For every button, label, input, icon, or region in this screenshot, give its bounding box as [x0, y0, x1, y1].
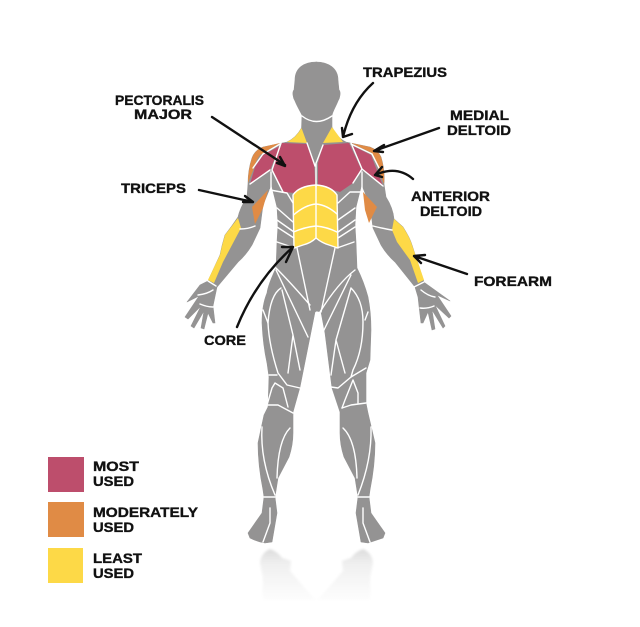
floor reflection of the feet [260, 549, 373, 600]
legend item: moderately used [48, 502, 199, 537]
muscle: triceps [252, 190, 377, 224]
label: pectoralis major [115, 92, 285, 166]
legend item: moderately used: USED [93, 519, 134, 535]
label: anterior deltoid: DELTOID [420, 203, 482, 219]
label: forearm: FOREARM [474, 273, 552, 289]
arrow: forearm [414, 255, 467, 274]
label: triceps: TRICEPS [121, 180, 186, 196]
muscle: core [293, 185, 338, 248]
muscle: medial deltoid [248, 143, 384, 184]
arrow: pectoralis major [212, 117, 285, 166]
legend item: least used: USED [93, 565, 134, 581]
label: core: CORE [204, 332, 246, 348]
label: forearm [414, 255, 552, 289]
legend [48, 457, 199, 583]
legend item: most used: USED [93, 473, 134, 489]
muscle: forearm [208, 218, 424, 283]
label: medial deltoid: MEDIAL [450, 107, 509, 123]
label: anterior deltoid: ANTERIOR [411, 188, 490, 204]
label: trapezius [342, 64, 447, 137]
body figure [185, 62, 451, 543]
arrow: triceps [199, 190, 253, 202]
label: core [204, 247, 293, 348]
arrow: medial deltoid [374, 128, 439, 152]
legend item: least used: LEAST [93, 550, 142, 566]
legend item: least used [48, 548, 142, 583]
legend item: most used [48, 457, 139, 492]
label: pectoralis major: PECTORALIS [115, 92, 204, 108]
label: anterior deltoid [375, 167, 490, 219]
muscle: pectoralis major [272, 143, 361, 193]
label: triceps [121, 180, 253, 202]
arrow: trapezius [342, 83, 373, 137]
muscle separation lines [198, 116, 435, 542]
label: medial deltoid: DELTOID [447, 122, 511, 138]
label: trapezius: TRAPEZIUS [363, 64, 447, 80]
label: medial deltoid [374, 107, 511, 152]
body silhouette, right half [316, 62, 451, 543]
legend item: moderately used: MODERATELY [93, 504, 199, 520]
muscle: trapezius [287, 127, 343, 143]
muscle: anterior deltoid [250, 145, 383, 186]
body silhouette, left half [185, 62, 316, 543]
legend item: most used: MOST [93, 458, 139, 474]
label: pectoralis major: MAJOR [134, 106, 192, 122]
arrow: anterior deltoid [375, 167, 413, 179]
arrow: core [237, 247, 293, 327]
